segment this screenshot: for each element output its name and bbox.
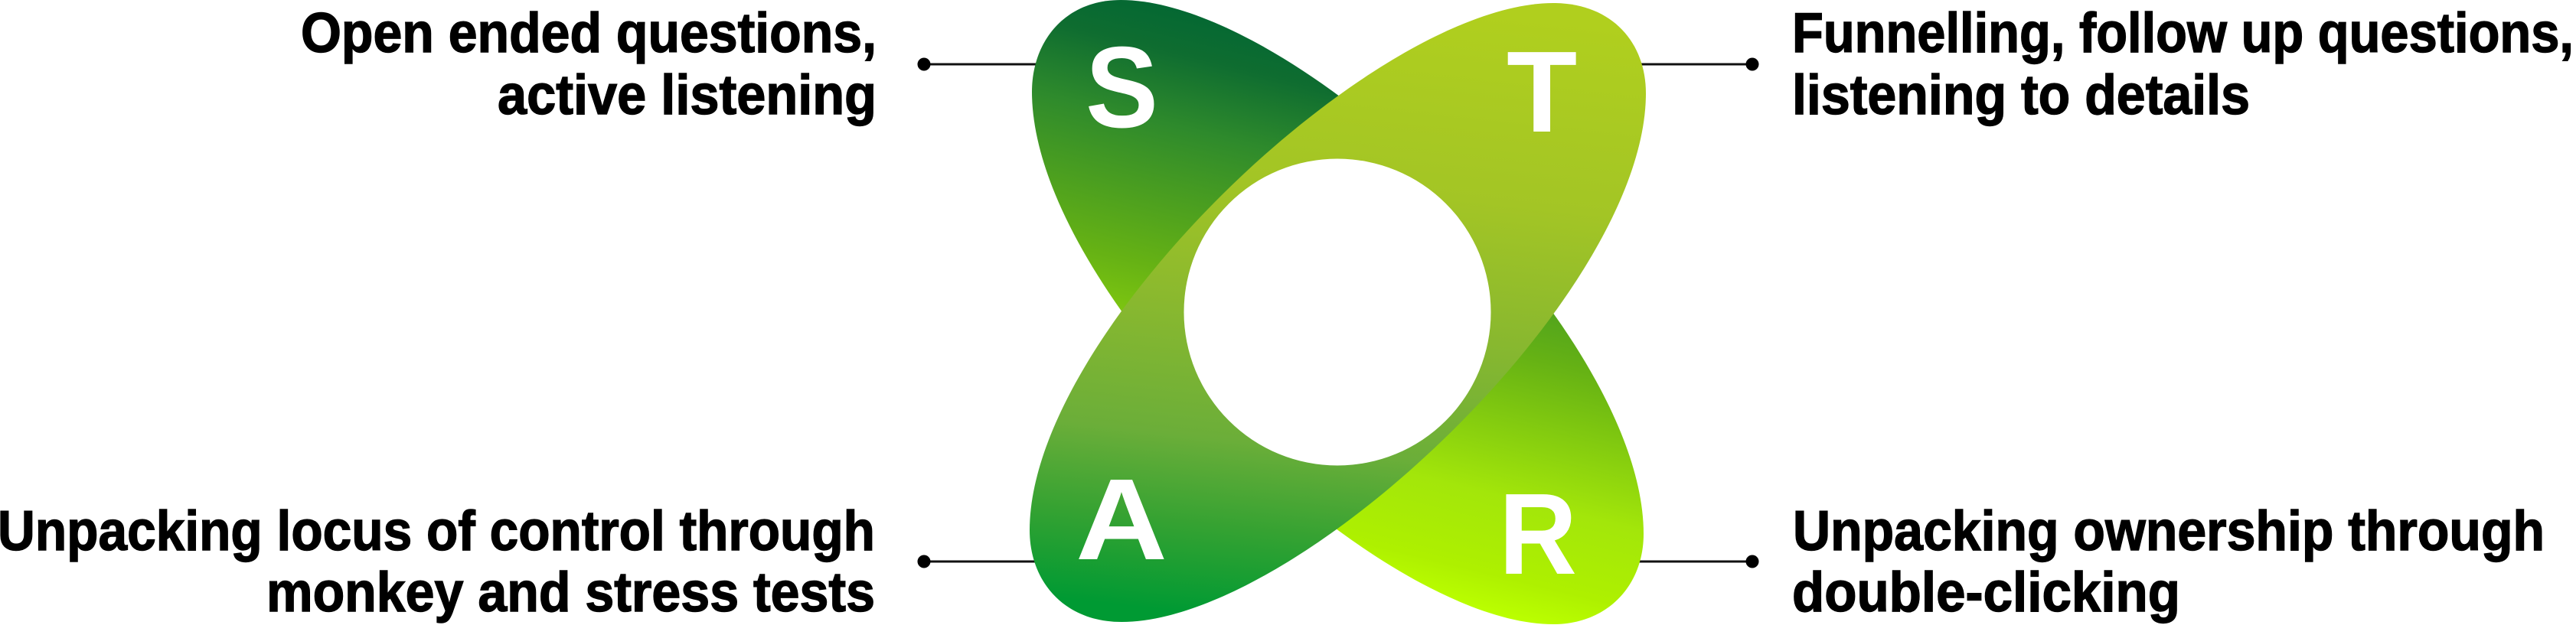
petal: S and R leaf	[1032, 0, 1644, 624]
connector: S	[917, 58, 1041, 70]
text: result	[1792, 500, 2545, 623]
text: situation: Open ended questions,	[301, 2, 877, 64]
text: action	[0, 500, 875, 623]
letter A: A	[1076, 454, 1167, 584]
letter S: S	[1086, 22, 1158, 151]
text: task	[1792, 2, 2574, 126]
letter T: T	[1507, 27, 1577, 156]
text: situation	[301, 2, 877, 126]
text: action: Unpacking locus of control through	[0, 500, 875, 562]
text: situation: active listening	[498, 64, 877, 126]
text: result: Unpacking ownership through	[1793, 500, 2545, 562]
connector: R	[1631, 555, 1759, 568]
text: action: monkey and stress tests	[266, 562, 875, 623]
connector: T	[1631, 58, 1759, 70]
text: task: listening to details	[1792, 64, 2250, 126]
petal: T and A leaf	[1030, 3, 1646, 622]
centre circle	[1184, 159, 1491, 465]
letter R: R	[1499, 469, 1577, 598]
connector: A	[917, 555, 1041, 568]
text: result: double-clicking	[1792, 562, 2180, 623]
